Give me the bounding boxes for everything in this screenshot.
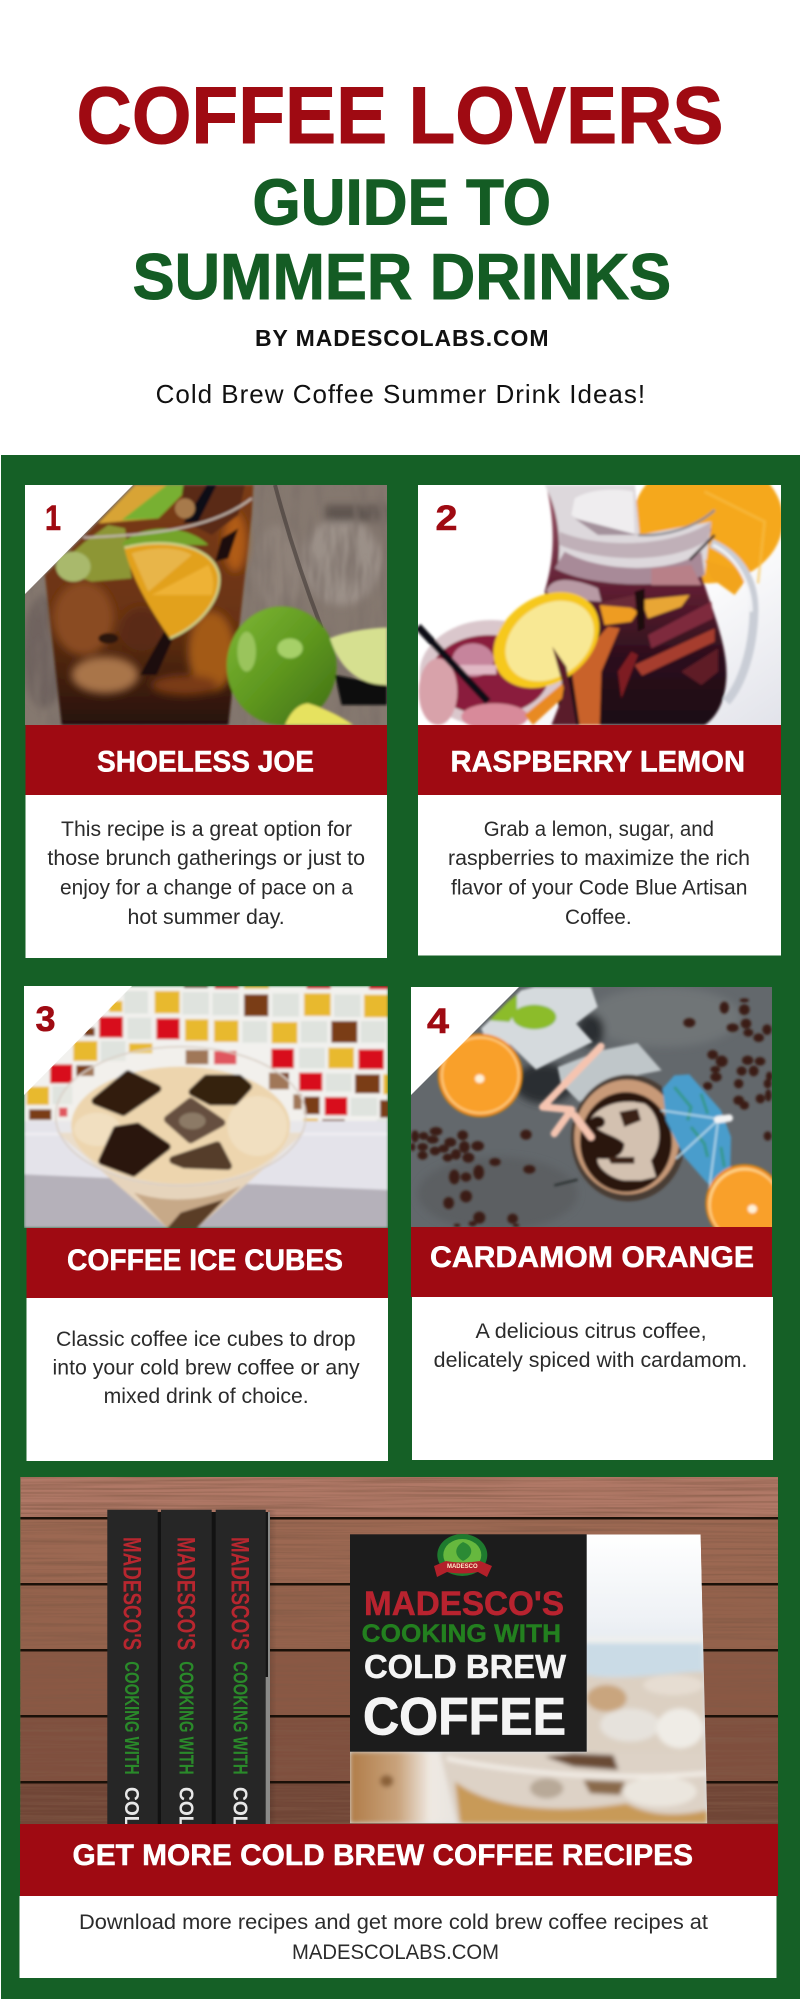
body text [47, 818, 365, 929]
corner triangle [24, 986, 132, 1095]
heading: GET MORE COLD BREW COFFEE RECIPES [72, 1839, 693, 1872]
body text: This recipe is a great option for [61, 818, 352, 841]
body text [79, 1911, 708, 1964]
body text: A delicious citrus coffee, [476, 1320, 707, 1343]
panel: card 4 cardamom orange [410, 987, 783, 1460]
black cover panel [350, 1534, 587, 1752]
icon: three book spines: MADESCO'S [172, 1537, 200, 1650]
panel: card 2 raspberry lemon [418, 457, 783, 956]
red title bar [20, 1824, 778, 1896]
body text: mixed drink of choice. [104, 1385, 309, 1408]
icon: three book spines: MADESCO'S [226, 1537, 254, 1650]
body text: raspberries to maximize the rich [448, 847, 750, 870]
title block [76, 71, 724, 409]
body text: Download more recipes and get more cold brew coffee recipes at [79, 1911, 708, 1934]
title: summer drinks: SUMMER DRINKS [133, 240, 671, 313]
heading: SHOELESS JOE [97, 746, 314, 779]
red title bar [26, 725, 387, 795]
panel: card 3 coffee ice cubes [24, 986, 388, 1461]
red title bar [418, 725, 781, 795]
number 3: 3 [36, 1000, 56, 1039]
panel: cold brew recipes book promo [20, 1477, 778, 1978]
corner triangle [25, 485, 133, 594]
icon: three book spines: COLD BREW [228, 1787, 250, 1905]
red title bar [411, 1227, 772, 1297]
icon: three book spines: COLD BREW [174, 1787, 196, 1905]
green panel background [1, 455, 800, 1999]
photo: iced drink with lime [22, 485, 387, 725]
number 4: 4 [427, 1002, 450, 1041]
body text: Grab a lemon, sugar, and [484, 818, 714, 841]
photo: pitcher of sangria [418, 485, 781, 725]
body text [52, 1328, 360, 1408]
icon: madesco logo badge: MADESCO [447, 1564, 478, 1570]
white body panel [412, 1297, 773, 1460]
body text: Coffee. [565, 906, 632, 929]
body text: into your cold brew coffee or any [52, 1357, 360, 1380]
body text: flavor of your Code Blue Artisan [451, 876, 748, 900]
book cover [350, 1534, 707, 1823]
icon: three book spines: COOKING WITH [120, 1661, 142, 1775]
icon: three book spines: COOKING WITH [174, 1661, 196, 1775]
body text: MADESCOLABS.COM [292, 1941, 499, 1964]
body text: delicately spiced with cardamom. [434, 1349, 747, 1372]
title: guide to: GUIDE TO [252, 166, 551, 238]
number 1: 1 [45, 499, 61, 538]
white body panel [26, 1298, 388, 1461]
cover title: COOKING WITH [362, 1620, 561, 1648]
icon: three book spines: COOKING WITH [228, 1661, 250, 1775]
body text: Classic coffee ice cubes to drop [56, 1328, 356, 1351]
title: coffee lovers: COFFEE LOVERS [76, 71, 724, 161]
heading: RASPBERRY LEMON [450, 746, 745, 779]
cover photo [350, 1534, 707, 1823]
byline: BY MADESCOLABS.COM [255, 325, 548, 351]
cover title: MADESCO'S [364, 1585, 564, 1623]
panel: card 1 shoeless joe [22, 485, 387, 958]
icon: three book spines: COLD BREW [120, 1787, 142, 1905]
corner triangle [418, 485, 525, 594]
icon: three book spines: MADESCO'S [117, 1537, 145, 1650]
body text: those brunch gatherings or just to [47, 847, 365, 870]
heading: COFFEE ICE CUBES [67, 1244, 343, 1277]
icon: madesco logo badge [434, 1534, 492, 1577]
body text [448, 818, 750, 929]
cover title: COLD BREW [364, 1648, 567, 1685]
corner triangle [411, 987, 519, 1095]
heading: CARDAMOM ORANGE [430, 1241, 754, 1274]
white body panel [418, 795, 781, 956]
cover title: COFFEE [363, 1688, 566, 1747]
photo: coffee ice cubes in glass [24, 986, 388, 1228]
number 2: 2 [436, 499, 458, 538]
white body panel [20, 1896, 776, 1978]
photo: wooden planks backdrop [20, 1477, 778, 1824]
cover title [362, 1585, 567, 1747]
icon: three book spines [107, 1510, 270, 1824]
body text: enjoy for a change of pace on a [60, 876, 353, 900]
red title bar [26, 1228, 388, 1298]
photo: iced coffee with oranges and beans [410, 987, 783, 1243]
subtitle: Cold Brew Coffee Summer Drink Ideas! [156, 379, 645, 409]
body text [434, 1320, 747, 1372]
body text: hot summer day. [128, 906, 285, 929]
white body panel [26, 795, 387, 958]
